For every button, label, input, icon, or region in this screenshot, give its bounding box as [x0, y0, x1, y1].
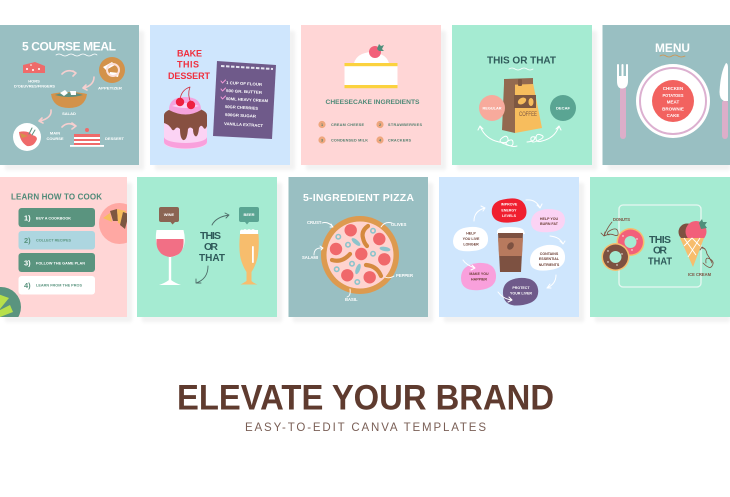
- panel: coffee benefits: [439, 177, 579, 317]
- step 2: [18, 231, 95, 250]
- panel: 5 course meal: APPETIZER: [98, 86, 122, 90]
- frame: [619, 205, 701, 287]
- icon: pink donut: [616, 228, 644, 256]
- blob: make you happier: [461, 263, 496, 290]
- ingredient list: CONDENSED MILK: [331, 138, 368, 142]
- plate menu: [636, 64, 710, 138]
- recipe note: 500GR SUGAR: [225, 112, 256, 119]
- heading: 5 course meal: 5 COURSE MEAL: [22, 40, 116, 54]
- icon: knife: [720, 63, 728, 139]
- pizza labels: BASIL: [345, 297, 358, 302]
- blob: contains essential nutrients: ESSENTIAL: [539, 257, 560, 261]
- pizza labels: OLIVES: [391, 222, 407, 227]
- icon: fork: [617, 64, 628, 139]
- bubble: wine: WINE: [164, 212, 175, 217]
- panel: 5 course meal: D'OEUVRES/FINGERS: [14, 84, 55, 88]
- heading: this or that: [648, 234, 673, 268]
- panel: 5 course meal: HORS: [28, 78, 40, 84]
- icon: appetizer: [99, 57, 125, 83]
- bubble: beer: BEER: [243, 212, 255, 217]
- blob: protect your liver: YOUR LIVER: [510, 292, 532, 296]
- panel: donuts or ice cream: [590, 177, 730, 317]
- blob: help you live longer: LONGER: [463, 242, 479, 246]
- blob: improve energy levels: LEVELS: [502, 214, 517, 218]
- heading: this or that: OR: [204, 241, 218, 253]
- plate menu: POTATOES: [662, 93, 684, 98]
- panel: 5-ingredient pizza: [288, 177, 428, 317]
- ingredient list: 1: [321, 123, 323, 127]
- heading: pizza: 5-INGREDIENT PIZZA: [303, 192, 414, 204]
- step 3: [18, 253, 95, 272]
- blob: improve energy levels: ENERGY: [501, 208, 517, 212]
- icon: beer glass: [239, 229, 259, 284]
- blob: improve energy levels: IMPROVE: [501, 202, 518, 206]
- panel: 5 course meal: COURSE: [46, 136, 64, 141]
- blob: protect your liver: PROTECT: [512, 286, 530, 290]
- icon: coffee cup: [497, 227, 525, 272]
- plate menu: BROWNIE: [662, 106, 684, 112]
- heading: this or that: THIS OR THAT: [487, 56, 556, 66]
- title: ELEVATE YOUR BRAND: [177, 378, 554, 418]
- recipe note: [213, 61, 276, 139]
- heading: this or that: [199, 230, 226, 264]
- heading: this or that: THIS: [200, 230, 221, 242]
- ingredient list: CREAM CHEESE: [331, 123, 364, 127]
- panel: coffee this or that: [452, 25, 592, 165]
- recipe note: 50ML HEAVY CREAM: [226, 96, 269, 103]
- recipe note: 50GR CHERRIES: [225, 104, 258, 111]
- step 4: [18, 276, 95, 294]
- panel: cheesecake ingredients: [301, 25, 441, 165]
- blob: contains essential nutrients: NUTRIENTS: [539, 263, 560, 267]
- pizza labels: CRUST: [307, 220, 322, 225]
- blob: help you live longer: HELP: [466, 232, 476, 236]
- label: ice cream: ICE CREAM: [688, 272, 711, 277]
- ingredient list: [318, 121, 422, 144]
- heading: menu: MENU: [655, 41, 690, 55]
- heading: this or that: THAT: [648, 256, 673, 268]
- label: donuts: DONUTS: [613, 217, 630, 222]
- panel: bake this dessert: [150, 25, 290, 165]
- ingredient list: 2: [379, 123, 381, 127]
- icon: layered cake: [164, 87, 207, 149]
- blob: help you live longer: YOU LIVE: [463, 237, 480, 241]
- blob: help you burn fat: [531, 209, 565, 232]
- recipe note: 500 GR. BUTTER: [226, 88, 262, 95]
- blob: make you happier: MAKE YOU: [469, 272, 489, 276]
- blob: improve energy levels: [492, 198, 526, 223]
- panel: 5 course meal: SALAD: [62, 111, 76, 116]
- subtitle: EASY-TO-EDIT CANVA TEMPLATES: [245, 422, 486, 434]
- panel: wine or beer: [137, 177, 277, 317]
- heading: learn how to cook: LEARN HOW TO COOK: [11, 192, 102, 202]
- icon: pizza: [321, 216, 399, 294]
- step 1: 1): [24, 214, 31, 222]
- icon: croissant: [99, 203, 127, 244]
- icon: chocolate donut: [602, 243, 630, 271]
- panel: 5 course meal: DESSERT: [105, 136, 125, 141]
- heading: bake this dessert: BAKE: [177, 48, 202, 58]
- plate menu: MEAT: [667, 100, 679, 104]
- blob: protect your liver: [503, 278, 538, 306]
- ingredient list: CRACKERS: [388, 138, 411, 142]
- step 3: FOLLOW THE GAME PLAN: [36, 262, 85, 266]
- heading: this or that: THAT: [199, 252, 226, 264]
- heading: bake this dessert: [168, 48, 210, 81]
- option: decap: DECAF: [556, 106, 571, 110]
- heading: this or that: OR: [653, 244, 667, 256]
- heading: bake this dessert: THIS: [177, 60, 199, 70]
- option: regular: REGULAR: [482, 106, 502, 110]
- icon: salad plate: [0, 287, 21, 317]
- panel: menu: [602, 25, 730, 165]
- pizza labels: PEPPER: [396, 273, 413, 278]
- recipe note: VANILLA EXTRACT: [224, 121, 264, 128]
- panel: 5 course meal: MAIN: [50, 130, 60, 136]
- plate menu: CAKE: [667, 113, 679, 118]
- ingredient list: 3: [321, 138, 323, 142]
- icon: ice cream: [678, 219, 707, 267]
- step 2: 2): [24, 236, 31, 245]
- arrows: [196, 213, 229, 283]
- arrows: [39, 71, 94, 129]
- pizza labels: [302, 220, 413, 302]
- icon: salad bowl: [51, 90, 87, 108]
- arrows: benefit cycle: [463, 200, 565, 302]
- ingredient list: 4: [379, 138, 382, 142]
- blob: make you happier: HAPPIER: [471, 278, 487, 282]
- step 1: BUY A COOKBOOK: [36, 216, 71, 220]
- step 4: LEARN FROM THE PROS: [36, 284, 82, 288]
- icon: coffee bag: COFFEE: [519, 111, 537, 118]
- step 1: [18, 208, 95, 227]
- step 4: 4): [24, 281, 31, 290]
- blob: contains essential nutrients: [530, 245, 565, 271]
- arrows: curly: [478, 126, 561, 146]
- step 3: 3): [24, 258, 31, 268]
- heading: bake this dessert: DESSERT: [168, 71, 210, 81]
- pizza labels: SALAMI: [302, 255, 318, 260]
- panel: 5 course meal: [0, 25, 139, 165]
- plate menu: CHICKEN: [663, 86, 683, 91]
- panel: learn how to cook: [0, 177, 127, 317]
- blob: help you burn fat: BURN FAT: [540, 222, 559, 226]
- icon: cheesecake: [344, 44, 398, 88]
- recipe note: 1 CUP OF FLOUR: [226, 80, 262, 87]
- blob: help you burn fat: HELP YOU: [540, 217, 559, 221]
- icon: wine glass: [156, 230, 185, 285]
- ingredient list: STRAWBERRIES: [388, 123, 422, 127]
- heading: this or that: THIS: [649, 234, 671, 246]
- blob: help you live longer: [453, 227, 488, 251]
- blob: contains essential nutrients: CONTAINS: [540, 252, 559, 256]
- icon: hors d'oeuvres: [23, 62, 45, 73]
- icon: dessert cake: [70, 128, 104, 147]
- step 2: COLLECT RECIPES: [36, 238, 71, 242]
- icon: main course: [13, 123, 41, 151]
- heading: cheesecake ingredients: CHEESECAKE INGREDIENTS: [326, 99, 420, 106]
